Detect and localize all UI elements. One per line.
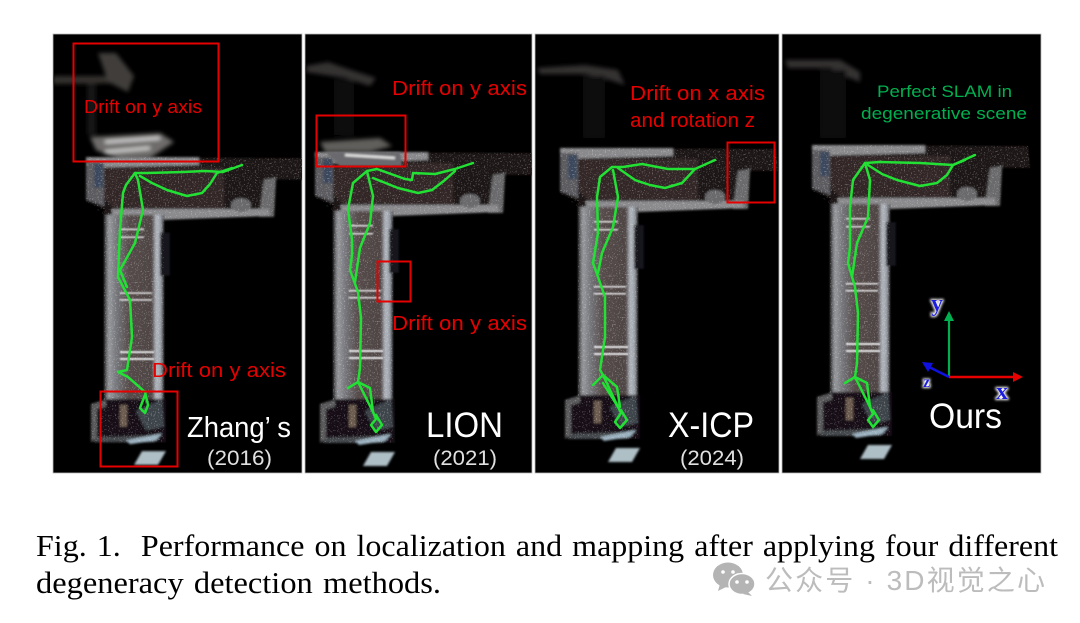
watermark: 公众号 · 3D视觉之心 xyxy=(765,565,1045,596)
label: drift bottom: Drift on y axis xyxy=(392,313,527,335)
drifted point cloud fragments xyxy=(306,62,392,152)
trajectory xyxy=(593,160,715,428)
map xyxy=(86,157,304,465)
drifted point cloud fragments xyxy=(53,53,174,160)
label: drift bottom: Drift on y axis xyxy=(152,360,286,382)
map xyxy=(812,145,1030,459)
label: drift xyxy=(630,83,765,132)
method name: Zhang’ s xyxy=(187,412,291,444)
year: (2021) xyxy=(433,447,497,470)
red box xyxy=(728,142,774,202)
panel: LION 2021 xyxy=(305,34,533,473)
axes: x xyxy=(996,379,1008,405)
caption: Fig. 1. Performance on localization and mapping after applying four different xyxy=(36,528,1058,563)
drifted point cloud fragments xyxy=(537,65,625,138)
red box middle xyxy=(378,262,410,302)
trajectory xyxy=(118,165,242,413)
label: drift: and rotation z xyxy=(630,110,755,132)
axes: y xyxy=(931,291,943,317)
method name: LION xyxy=(426,406,503,445)
year: (2024) xyxy=(680,447,744,470)
map xyxy=(560,148,778,462)
label: drift: Drift on x axis xyxy=(630,83,765,105)
caption: degeneracy detection methods. xyxy=(36,565,441,600)
red box top xyxy=(316,116,406,166)
label: perfect slam: degenerative scene xyxy=(861,104,1027,123)
label: drift top: Drift on y axis xyxy=(392,78,527,100)
point cloud top fragment xyxy=(785,60,860,138)
method name: Ours xyxy=(929,397,1002,436)
map xyxy=(315,152,533,466)
axes: z xyxy=(923,374,930,391)
label: perfect slam: Perfect SLAM in xyxy=(877,82,1012,101)
red box bottom xyxy=(100,392,178,466)
caption xyxy=(36,528,1058,600)
method name: X-ICP xyxy=(668,406,754,445)
trajectory xyxy=(845,155,975,427)
year: (2016) xyxy=(207,447,272,470)
panel: Ours xyxy=(782,34,1041,473)
trajectory xyxy=(348,163,473,432)
red box top xyxy=(74,44,218,162)
label: drift top: Drift on y axis xyxy=(84,97,202,117)
axes xyxy=(922,291,1023,405)
label: perfect slam xyxy=(861,82,1027,123)
panel: X-ICP 2024 xyxy=(535,34,779,473)
panel: Zhang's 2016 xyxy=(53,34,304,473)
icon: wechat xyxy=(713,562,755,596)
